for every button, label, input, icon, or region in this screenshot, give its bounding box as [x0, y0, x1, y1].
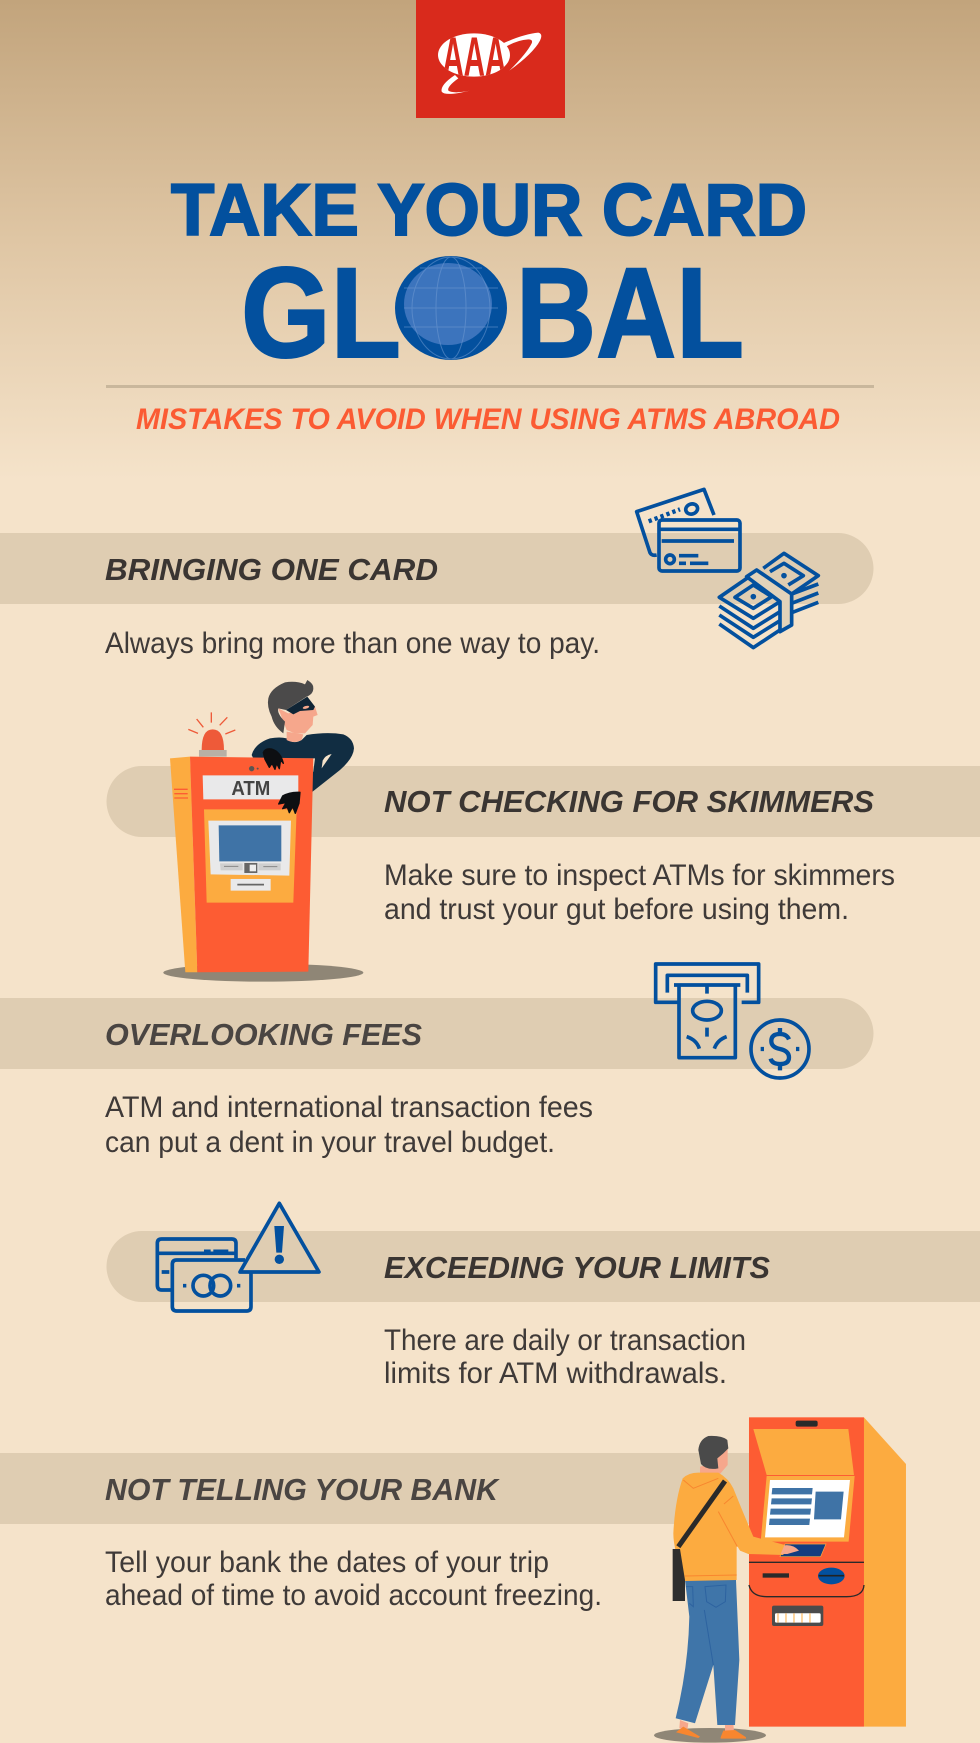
icon: cards with warning triangle — [157, 1203, 319, 1311]
illustration: traveler using ATM — [654, 1417, 906, 1743]
ATM sign: ATM — [231, 777, 270, 800]
text: exceeding your limits: There are daily or transaction — [384, 1324, 746, 1357]
heading: bringing one card: BRINGING ONE CARD — [105, 552, 438, 587]
globe — [395, 256, 507, 360]
subtitle: MISTAKES TO AVOID WHEN USING ATMS ABROAD — [136, 403, 840, 436]
title rule — [106, 385, 874, 388]
text: not telling your bank: Tell your bank the dates of your trip — [105, 1546, 549, 1579]
text: not checking for skimmers — [384, 859, 895, 926]
text: bringing one card: Always bring more than one way to pay. — [105, 627, 600, 660]
text: overlooking fees: can put a dent in your travel budget. — [105, 1126, 555, 1159]
ATM sign — [203, 775, 298, 800]
illustration: thief at ATM — [163, 680, 363, 982]
text: not checking for skimmers: Make sure to inspect ATMs for skimmers — [384, 859, 895, 892]
ground shadow — [654, 1728, 766, 1743]
heading: overlooking fees: OVERLOOKING FEES — [105, 1017, 422, 1052]
ATM slot — [656, 964, 759, 1002]
bar: overlooking fees — [0, 998, 873, 1069]
dollar coin — [751, 1020, 809, 1078]
stack of cash — [719, 553, 818, 648]
text: overlooking fees — [105, 1091, 593, 1159]
thief hands — [263, 749, 300, 813]
text: exceeding your limits — [384, 1324, 746, 1390]
text: overlooking fees: ATM and international transaction fees — [105, 1091, 593, 1124]
title: global: BAL — [516, 242, 744, 385]
text: not checking for skimmers: and trust your gut before using them. — [384, 893, 849, 926]
bar: exceeding your limits — [106, 1231, 980, 1302]
back card — [637, 489, 714, 555]
icon: cash from ATM with dollar coin — [656, 964, 809, 1078]
thief — [252, 680, 354, 795]
title: global: GL — [241, 242, 401, 385]
title: take your card: TAKE YOUR CARD — [171, 170, 807, 251]
ground shadow — [163, 964, 363, 982]
traveler — [673, 1436, 799, 1739]
beacon — [188, 712, 235, 757]
text: exceeding your limits: limits for ATM withdrawals. — [384, 1357, 727, 1390]
title: global — [241, 242, 744, 385]
heading: not telling your bank: NOT TELLING YOUR BANK — [105, 1472, 501, 1507]
heading: exceeding your limits: EXCEEDING YOUR LIMITS — [384, 1250, 770, 1285]
bar: not telling your bank — [0, 1453, 760, 1524]
text: not telling your bank — [105, 1546, 602, 1612]
title: global: O — [396, 242, 506, 385]
logo: AAA: AAA — [442, 25, 506, 88]
back card — [157, 1239, 236, 1290]
text: not telling your bank: ahead of time to avoid account freezing. — [105, 1579, 602, 1612]
heading: not checking for skimmers: NOT CHECKING FOR SKIMMERS — [384, 784, 874, 819]
banknote — [679, 985, 735, 1058]
ATM body — [170, 757, 313, 972]
warning triangle — [240, 1203, 319, 1272]
front card — [172, 1260, 251, 1311]
front card — [659, 520, 740, 571]
icon: cards and cash — [637, 489, 818, 648]
logo: AAA — [416, 0, 565, 118]
bar: not checking for skimmers — [106, 766, 980, 837]
ATM screen — [204, 809, 297, 903]
bar: bringing one card — [0, 533, 873, 604]
ATM machine — [749, 1417, 906, 1727]
